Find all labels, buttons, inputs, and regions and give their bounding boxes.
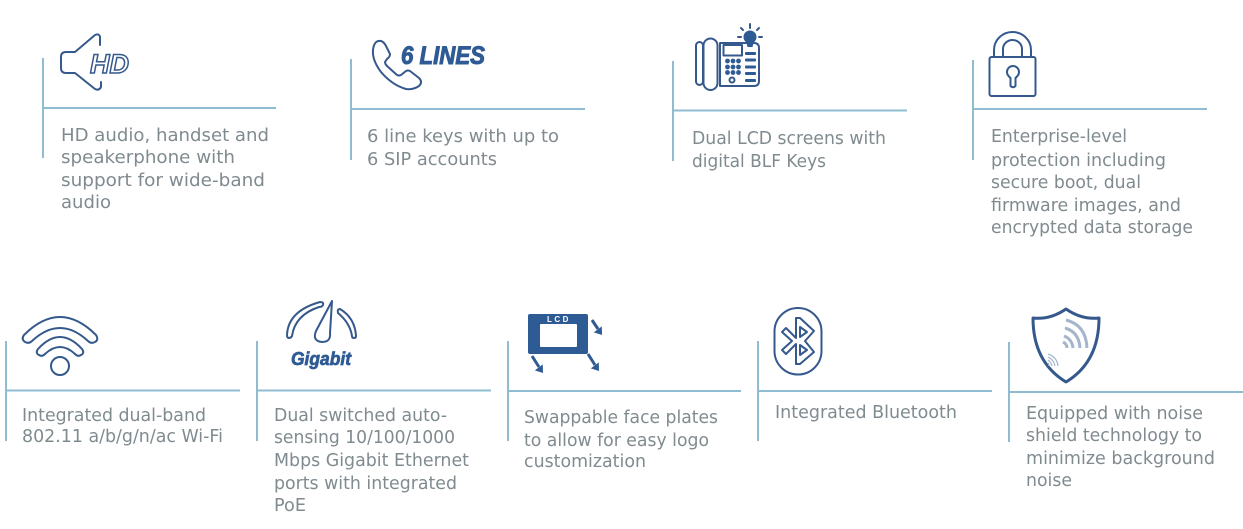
panel: Bluetooth	[758, 308, 992, 441]
panel: face plates	[508, 314, 741, 472]
text: noise shield description: noise	[1026, 470, 1072, 491]
icon: HD speaker	[61, 34, 129, 90]
text: security description: encrypted data storage	[991, 217, 1193, 238]
text: HD audio description	[61, 125, 269, 213]
text: Wi-Fi description: Integrated dual-band	[22, 405, 206, 426]
icon: gauge with Gigabit	[287, 301, 356, 369]
icon: LCD face plate: LCD	[547, 315, 571, 324]
text: face plates description: customization	[524, 451, 646, 472]
text: security description: Enterprise-level	[991, 126, 1127, 147]
text: line keys description: 6 line keys with up to	[367, 126, 559, 147]
icon: wifi	[23, 317, 97, 375]
icon: HD speaker: HD	[90, 49, 129, 79]
panel: dual LCD	[673, 24, 907, 172]
panel: noise shield	[1009, 309, 1243, 491]
panel: Wi-Fi	[6, 317, 240, 447]
text: security description: secure boot, dual	[991, 172, 1141, 193]
text: security description: protection including	[991, 150, 1166, 171]
text: gigabit description: Mbps Gigabit Ethernet	[274, 450, 469, 471]
icon: LCD face plate	[528, 314, 602, 373]
icon: noise shield	[1033, 309, 1099, 382]
text: face plates description: Swappable face plates	[524, 407, 718, 428]
text: HD audio description: audio	[61, 192, 111, 213]
text: HD audio description: speakerphone with	[61, 147, 235, 168]
text: noise shield description: shield technology to	[1026, 425, 1202, 446]
text: security description	[991, 126, 1193, 238]
text: HD audio description: HD audio, handset and	[61, 125, 269, 146]
icon: handset with 6 LINES	[373, 41, 485, 89]
text: face plates description: to allow for easy logo	[524, 430, 709, 451]
icon: handset with 6 LINES: 6 LINES	[401, 42, 485, 70]
text: Wi-Fi description: 802.11 a/b/g/n/ac Wi-Fi	[22, 426, 223, 447]
text: gigabit description: Dual switched auto-	[274, 405, 447, 426]
panel: HD audio	[43, 34, 276, 213]
text: LCD description	[692, 128, 886, 172]
panel: gigabit	[257, 301, 491, 516]
text: face plates description	[524, 407, 718, 472]
text: Wi-Fi description	[22, 405, 223, 447]
text: gigabit description: PoE	[274, 495, 306, 516]
text: gigabit description: sensing 10/100/1000	[274, 427, 455, 448]
text: security description: firmware images, and	[991, 195, 1181, 216]
text: noise shield description: Equipped with noise	[1026, 403, 1203, 424]
panel: security	[973, 32, 1207, 238]
text: LCD description: Dual LCD screens with	[692, 128, 886, 149]
text: LCD description: digital BLF Keys	[692, 151, 826, 172]
icon: gauge with Gigabit: Gigabit	[291, 349, 352, 369]
text: noise shield description: minimize background	[1026, 448, 1215, 469]
text: line keys description: 6 SIP accounts	[367, 149, 497, 170]
icon: desk phone with light bulb	[696, 24, 762, 90]
icon: padlock	[990, 32, 1036, 96]
text: gigabit description	[274, 405, 469, 516]
text: line keys description	[367, 126, 559, 170]
text: Bluetooth description: Integrated Bluetooth	[775, 402, 957, 423]
text: noise shield description	[1026, 403, 1215, 491]
text: gigabit description: ports with integrated	[274, 473, 457, 494]
panel: 6 lines	[351, 41, 585, 170]
text: HD audio description: support for wide-band	[61, 170, 265, 191]
icon: Bluetooth	[774, 308, 822, 374]
